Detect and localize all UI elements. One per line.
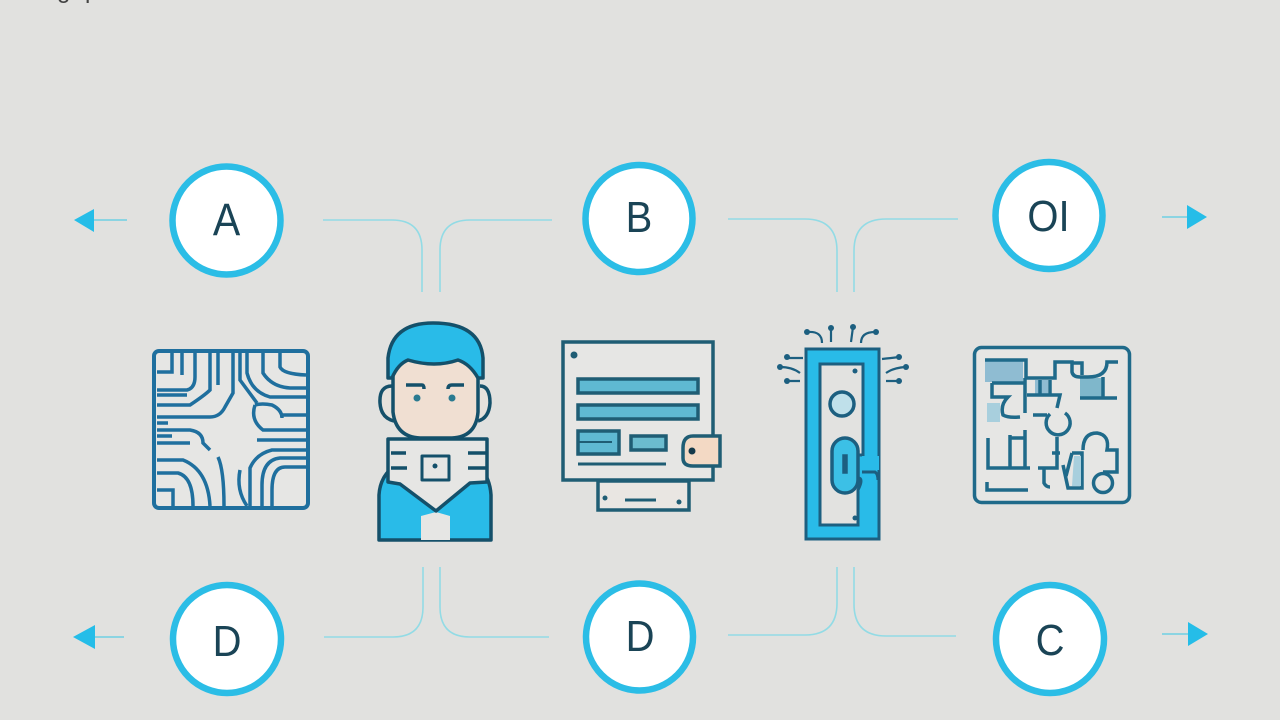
icon: browser window [563,342,720,510]
connector lines [323,219,958,637]
badge: D centre [586,584,693,690]
badge: D left [173,585,281,693]
arrow: bottom left [73,625,124,649]
body [379,468,491,540]
icon: puzzle pieces [974,348,1130,502]
badge: B [586,165,692,272]
chip [388,439,487,511]
icon: person with chip [379,323,491,540]
hair [388,323,483,378]
icon: circuit board [154,351,308,508]
badge: A [172,166,280,274]
badge: C: C [1036,615,1064,664]
badge: C [996,585,1104,693]
eyebrows and eyes [406,385,464,389]
shirt [421,512,450,540]
badge: OI: OI [1027,191,1070,240]
badge: B: B [626,192,652,241]
badge: OI [996,162,1102,269]
arrow: top right [1162,205,1207,229]
badge: D left: D [213,616,241,665]
face [393,358,478,438]
arrow: top left [74,209,127,232]
ears [380,386,394,421]
badge: A: A [213,195,240,245]
badge: D centre: D [626,611,654,660]
arrow: bottom right [1162,622,1208,646]
icon: door lock device [777,324,909,539]
